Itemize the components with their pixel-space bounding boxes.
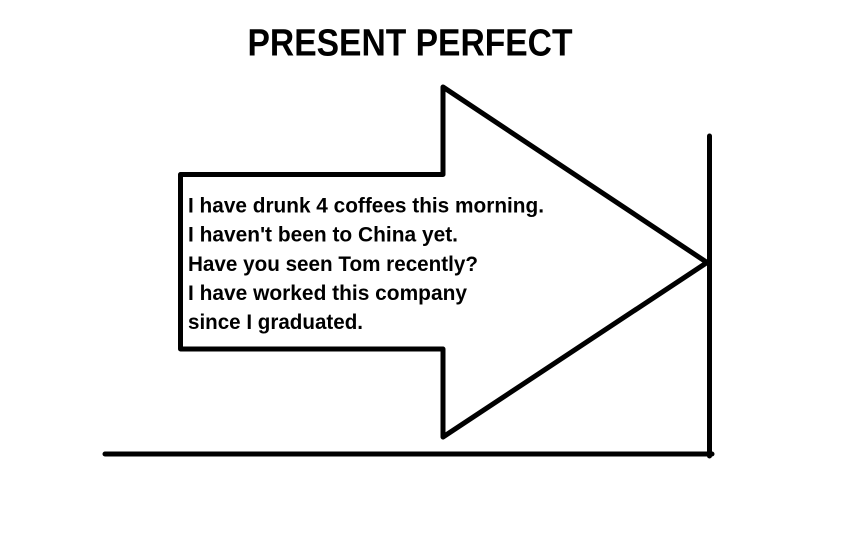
example sentences: I haven't been to China yet. bbox=[188, 222, 458, 246]
timeline axis bbox=[105, 136, 712, 456]
title: PRESENT PERFECT bbox=[248, 22, 572, 64]
example sentences: Have you seen Tom recently? bbox=[188, 252, 478, 276]
example sentences bbox=[188, 194, 544, 334]
example sentences: I have worked this company bbox=[188, 281, 467, 305]
arrow bbox=[180, 87, 707, 437]
example sentences: since I graduated. bbox=[188, 310, 363, 334]
example sentences: I have drunk 4 coffees this morning. bbox=[188, 194, 544, 218]
